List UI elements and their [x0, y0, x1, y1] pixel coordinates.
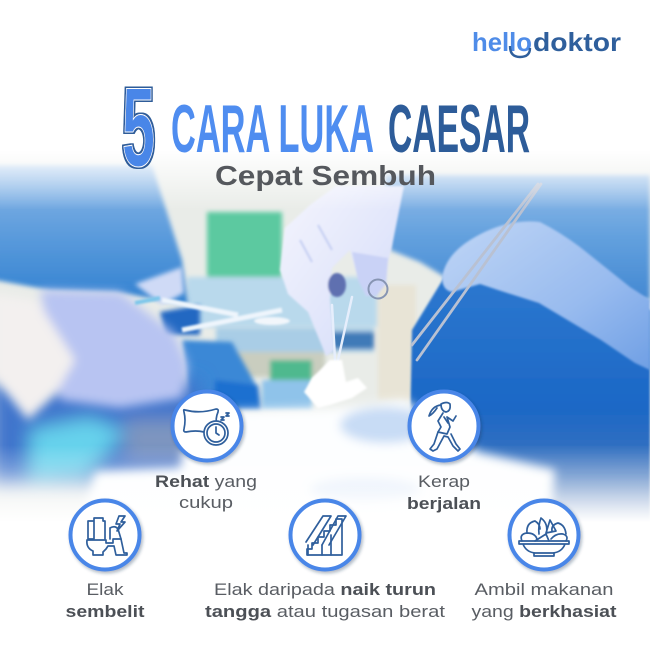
lower-left blue area with cyan streaks: [0, 380, 200, 485]
item: kerap berjalan: [407, 392, 481, 513]
item: makanan berkhasiat: [472, 500, 617, 621]
item: makanan berkhasiat: yang berkhasiat: [472, 603, 617, 621]
scissors: [135, 298, 290, 330]
icon: walking woman: [410, 392, 478, 460]
item: elak sembelit: sembelit: [66, 603, 145, 621]
right surgeon upper gown: [385, 175, 650, 300]
item: kerap berjalan: berjalan: [407, 495, 481, 513]
label: Rehat yang: [155, 473, 257, 491]
icon: salad bowl: [510, 500, 578, 570]
left blurred glove and arm: [0, 290, 188, 420]
scissors hand: [135, 267, 184, 305]
white drape: [80, 400, 555, 530]
subtitle: Cepat Sembuh: [215, 160, 436, 191]
label: Kerap: [418, 473, 470, 491]
item: elak sembelit: [66, 500, 145, 621]
right surgeon lower gown: [409, 278, 650, 517]
title: [122, 65, 530, 191]
bottom fade to white: [0, 445, 650, 529]
item: rehat: cukup: [179, 494, 233, 512]
centre glove: [280, 186, 404, 356]
logo: hellodoktor: doktor: [533, 27, 621, 57]
icon: stethoscope: [510, 46, 530, 57]
heading words: CARA LUKA: [171, 91, 374, 167]
item: elak naik turun tangga: [205, 500, 445, 621]
label: Elak daripada naik turun: [214, 581, 436, 599]
logo: hellodoktor: hello: [472, 27, 532, 57]
logo: hellodoktor: [472, 27, 621, 57]
label: Elak: [86, 581, 124, 599]
clamp: [332, 280, 388, 360]
surgery photo background: [0, 150, 650, 530]
top fade to white: [0, 150, 650, 210]
item: elak naik turun tangga: tangga atau tugasan berat: [205, 603, 445, 621]
blurred theatre: green panel, table: [187, 212, 416, 410]
icon: pillow and clock: [172, 392, 242, 460]
icon: toilet: [70, 500, 140, 570]
left surgeon gown: [0, 165, 261, 410]
forceps: [412, 184, 541, 360]
item: rehat: [155, 392, 257, 512]
label: Ambil makanan: [474, 581, 614, 599]
gauze: [304, 360, 367, 408]
icon: stairs: [290, 500, 360, 570]
big number 5: 5: [122, 65, 155, 190]
right glove: [442, 221, 650, 370]
